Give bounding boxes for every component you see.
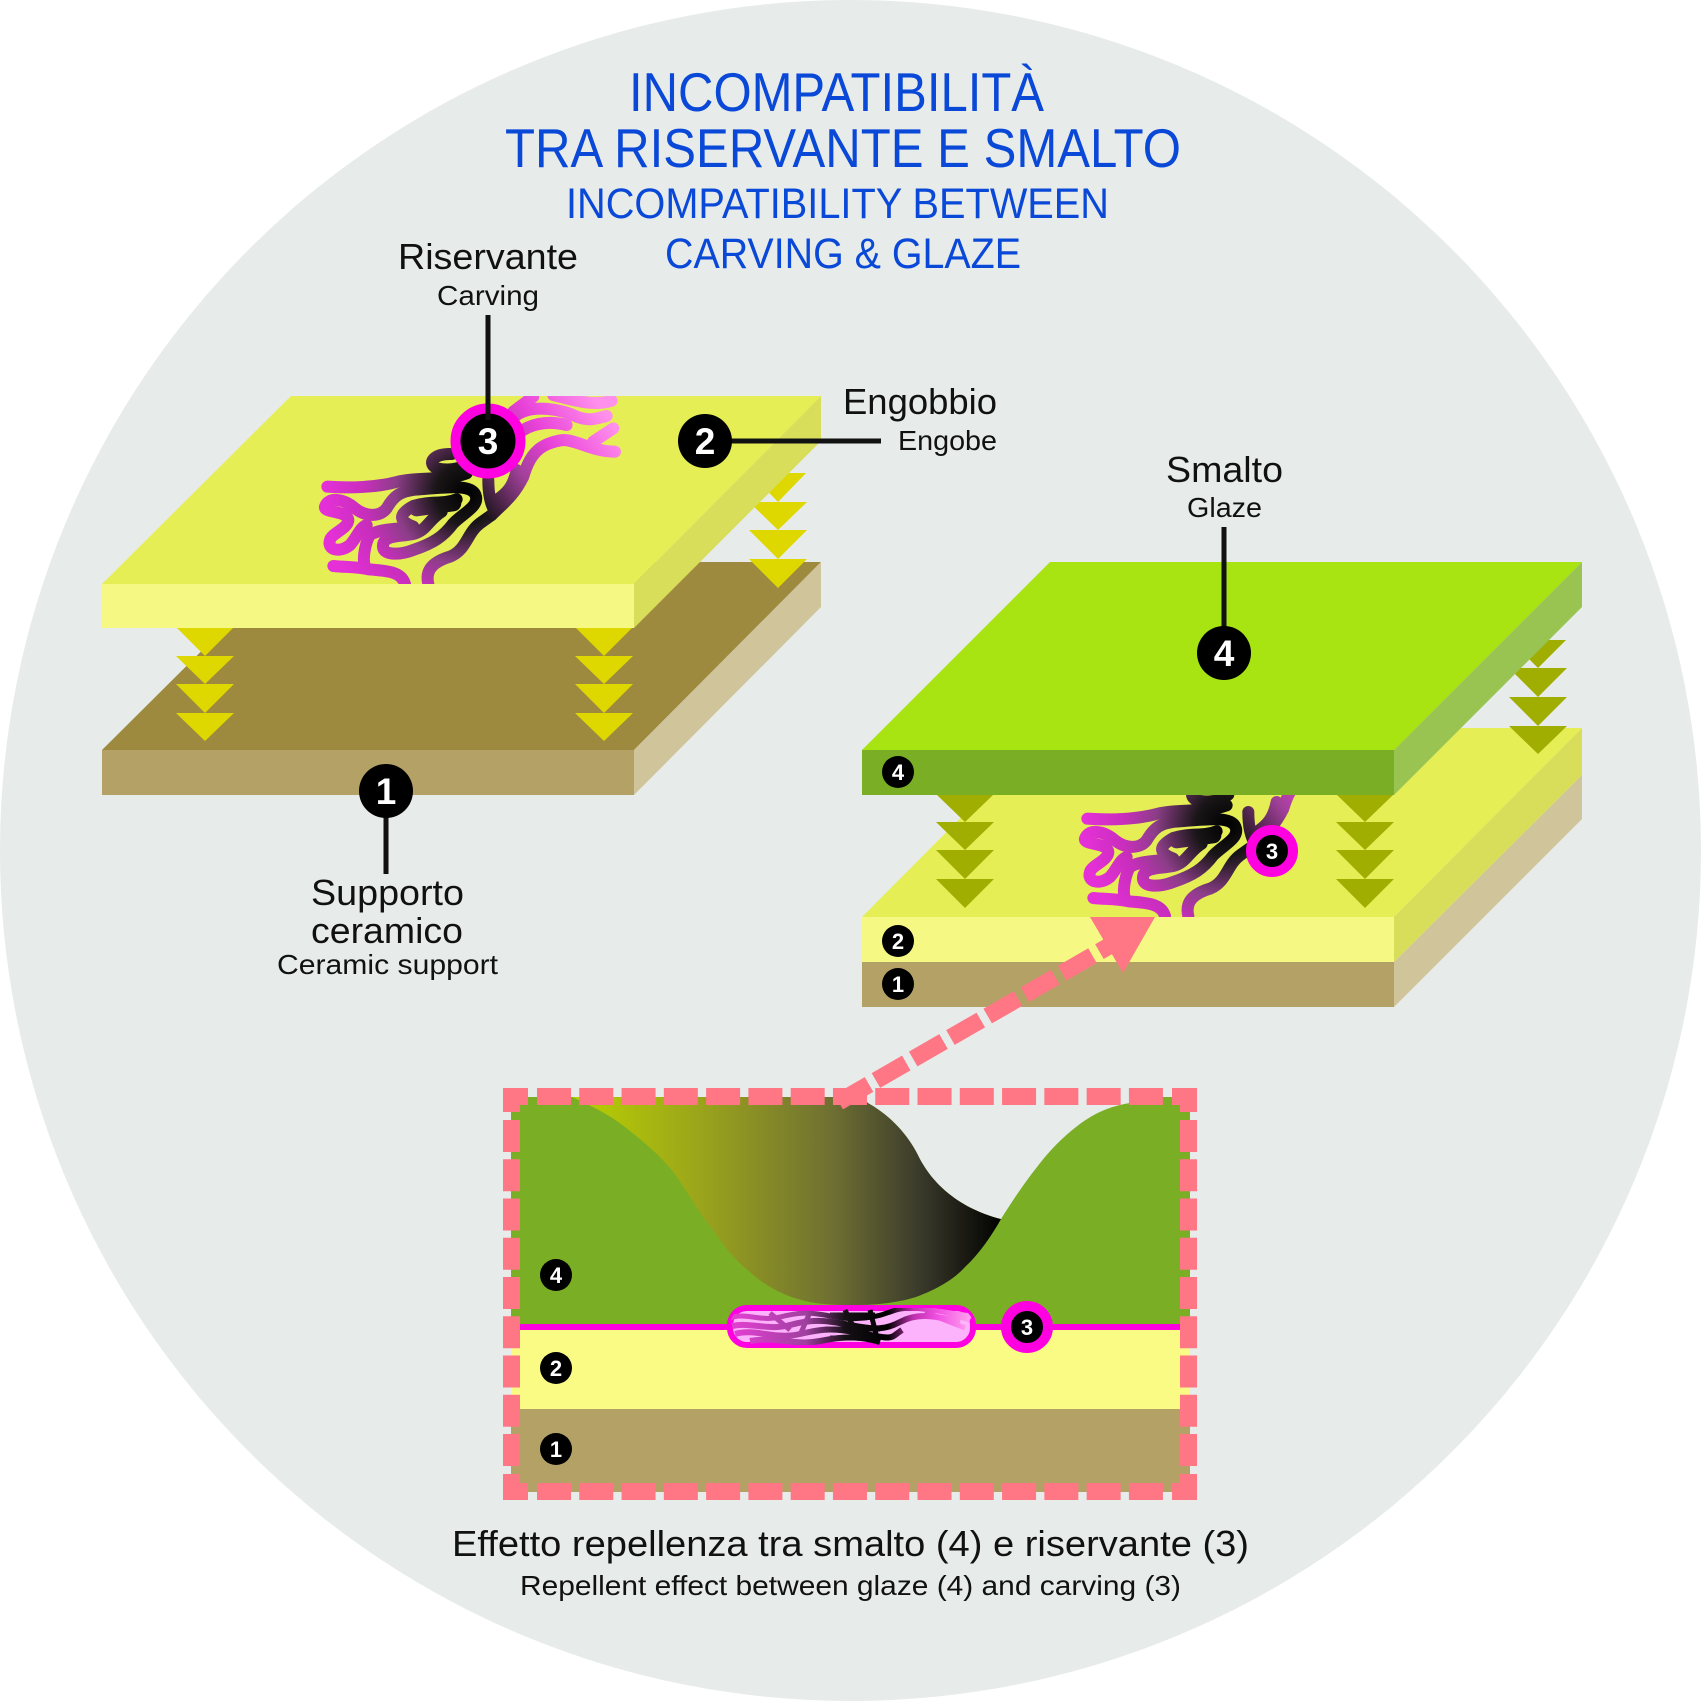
label: riservante (398, 236, 578, 311)
marker 4 (540, 1259, 572, 1291)
bare area from glaze retreat (863, 1097, 1160, 1219)
title (505, 61, 1181, 278)
small marker 2: 2 (892, 929, 904, 954)
title: TRA RISERVANTE E SMALTO (505, 117, 1181, 179)
engobe plate (102, 396, 821, 628)
ceramic and engobe plates (862, 728, 1582, 1007)
small marker 1: 1 (892, 972, 904, 997)
label: supporto ceramico: Ceramic support (277, 949, 498, 980)
label: engobbio (843, 381, 997, 456)
marker 3 with leader: 3 (478, 421, 498, 462)
right exploded stack (862, 527, 1582, 1007)
detail cross-section (511, 1096, 1190, 1492)
glaze layer with notch (511, 1097, 1190, 1327)
marker 1 (540, 1433, 572, 1465)
dashed frame (512, 1096, 1188, 1492)
title: CARVING & GLAZE (665, 230, 1021, 278)
label: supporto ceramico (277, 872, 498, 980)
ceramic support plate (102, 562, 821, 795)
label: supporto ceramico: Supporto (311, 872, 464, 913)
marker 2 with leader: 2 (695, 421, 715, 462)
carving line (520, 1324, 1180, 1330)
caption (452, 1523, 1249, 1601)
carving squiggle (325, 395, 615, 584)
marker 3: 3 (1021, 1315, 1033, 1340)
small marker 3 (1251, 830, 1293, 872)
label: smalto: Glaze (1187, 492, 1262, 523)
caption: Effetto repellenza tra smalto (4) e riservante (3) (452, 1523, 1249, 1564)
ceramic layer (511, 1409, 1190, 1492)
marker 4 with leader: 4 (1214, 633, 1235, 674)
arrows: engobe downward (176, 473, 807, 741)
marker 1 with leader: 1 (376, 771, 396, 812)
marker 2 (540, 1352, 572, 1384)
dashed arrow from detail to stack (839, 917, 1155, 1102)
title: INCOMPATIBILITÀ (629, 61, 1044, 123)
label: smalto (1166, 449, 1283, 523)
label: engobbio: Engobbio (843, 381, 997, 422)
marker 2: 2 (550, 1356, 562, 1381)
label: smalto: Smalto (1166, 449, 1283, 490)
caption: Repellent effect between glaze (4) and carving (3) (520, 1570, 1181, 1601)
label: supporto ceramico: ceramico (311, 910, 463, 951)
left exploded stack (102, 315, 881, 874)
label: engobbio: Engobe (898, 425, 997, 456)
marker 1: 1 (550, 1437, 562, 1462)
small marker 1 (882, 968, 914, 1000)
repelled glaze gradient area (572, 1097, 1001, 1305)
small marker 3: 3 (1266, 839, 1278, 864)
marker 2 with leader (678, 414, 881, 468)
arrows: glaze downward (936, 640, 1567, 908)
carving squiggle on engobe (1078, 795, 1296, 917)
small marker 4 (882, 756, 914, 788)
title: INCOMPATIBILITY BETWEEN (566, 180, 1109, 228)
label: riservante: Carving (437, 280, 539, 311)
marker 1 with leader (359, 764, 413, 874)
marker 4: 4 (550, 1263, 563, 1288)
marker 4 with leader (1197, 527, 1251, 680)
engobe layer (511, 1327, 1190, 1409)
small marker 4: 4 (892, 760, 905, 785)
carving pill (730, 1308, 973, 1345)
label: riservante: Riservante (398, 236, 578, 277)
marker 3 with leader (456, 315, 520, 474)
small marker 2 (882, 925, 914, 957)
glaze plate (862, 562, 1582, 795)
marker 3 (1006, 1306, 1048, 1348)
